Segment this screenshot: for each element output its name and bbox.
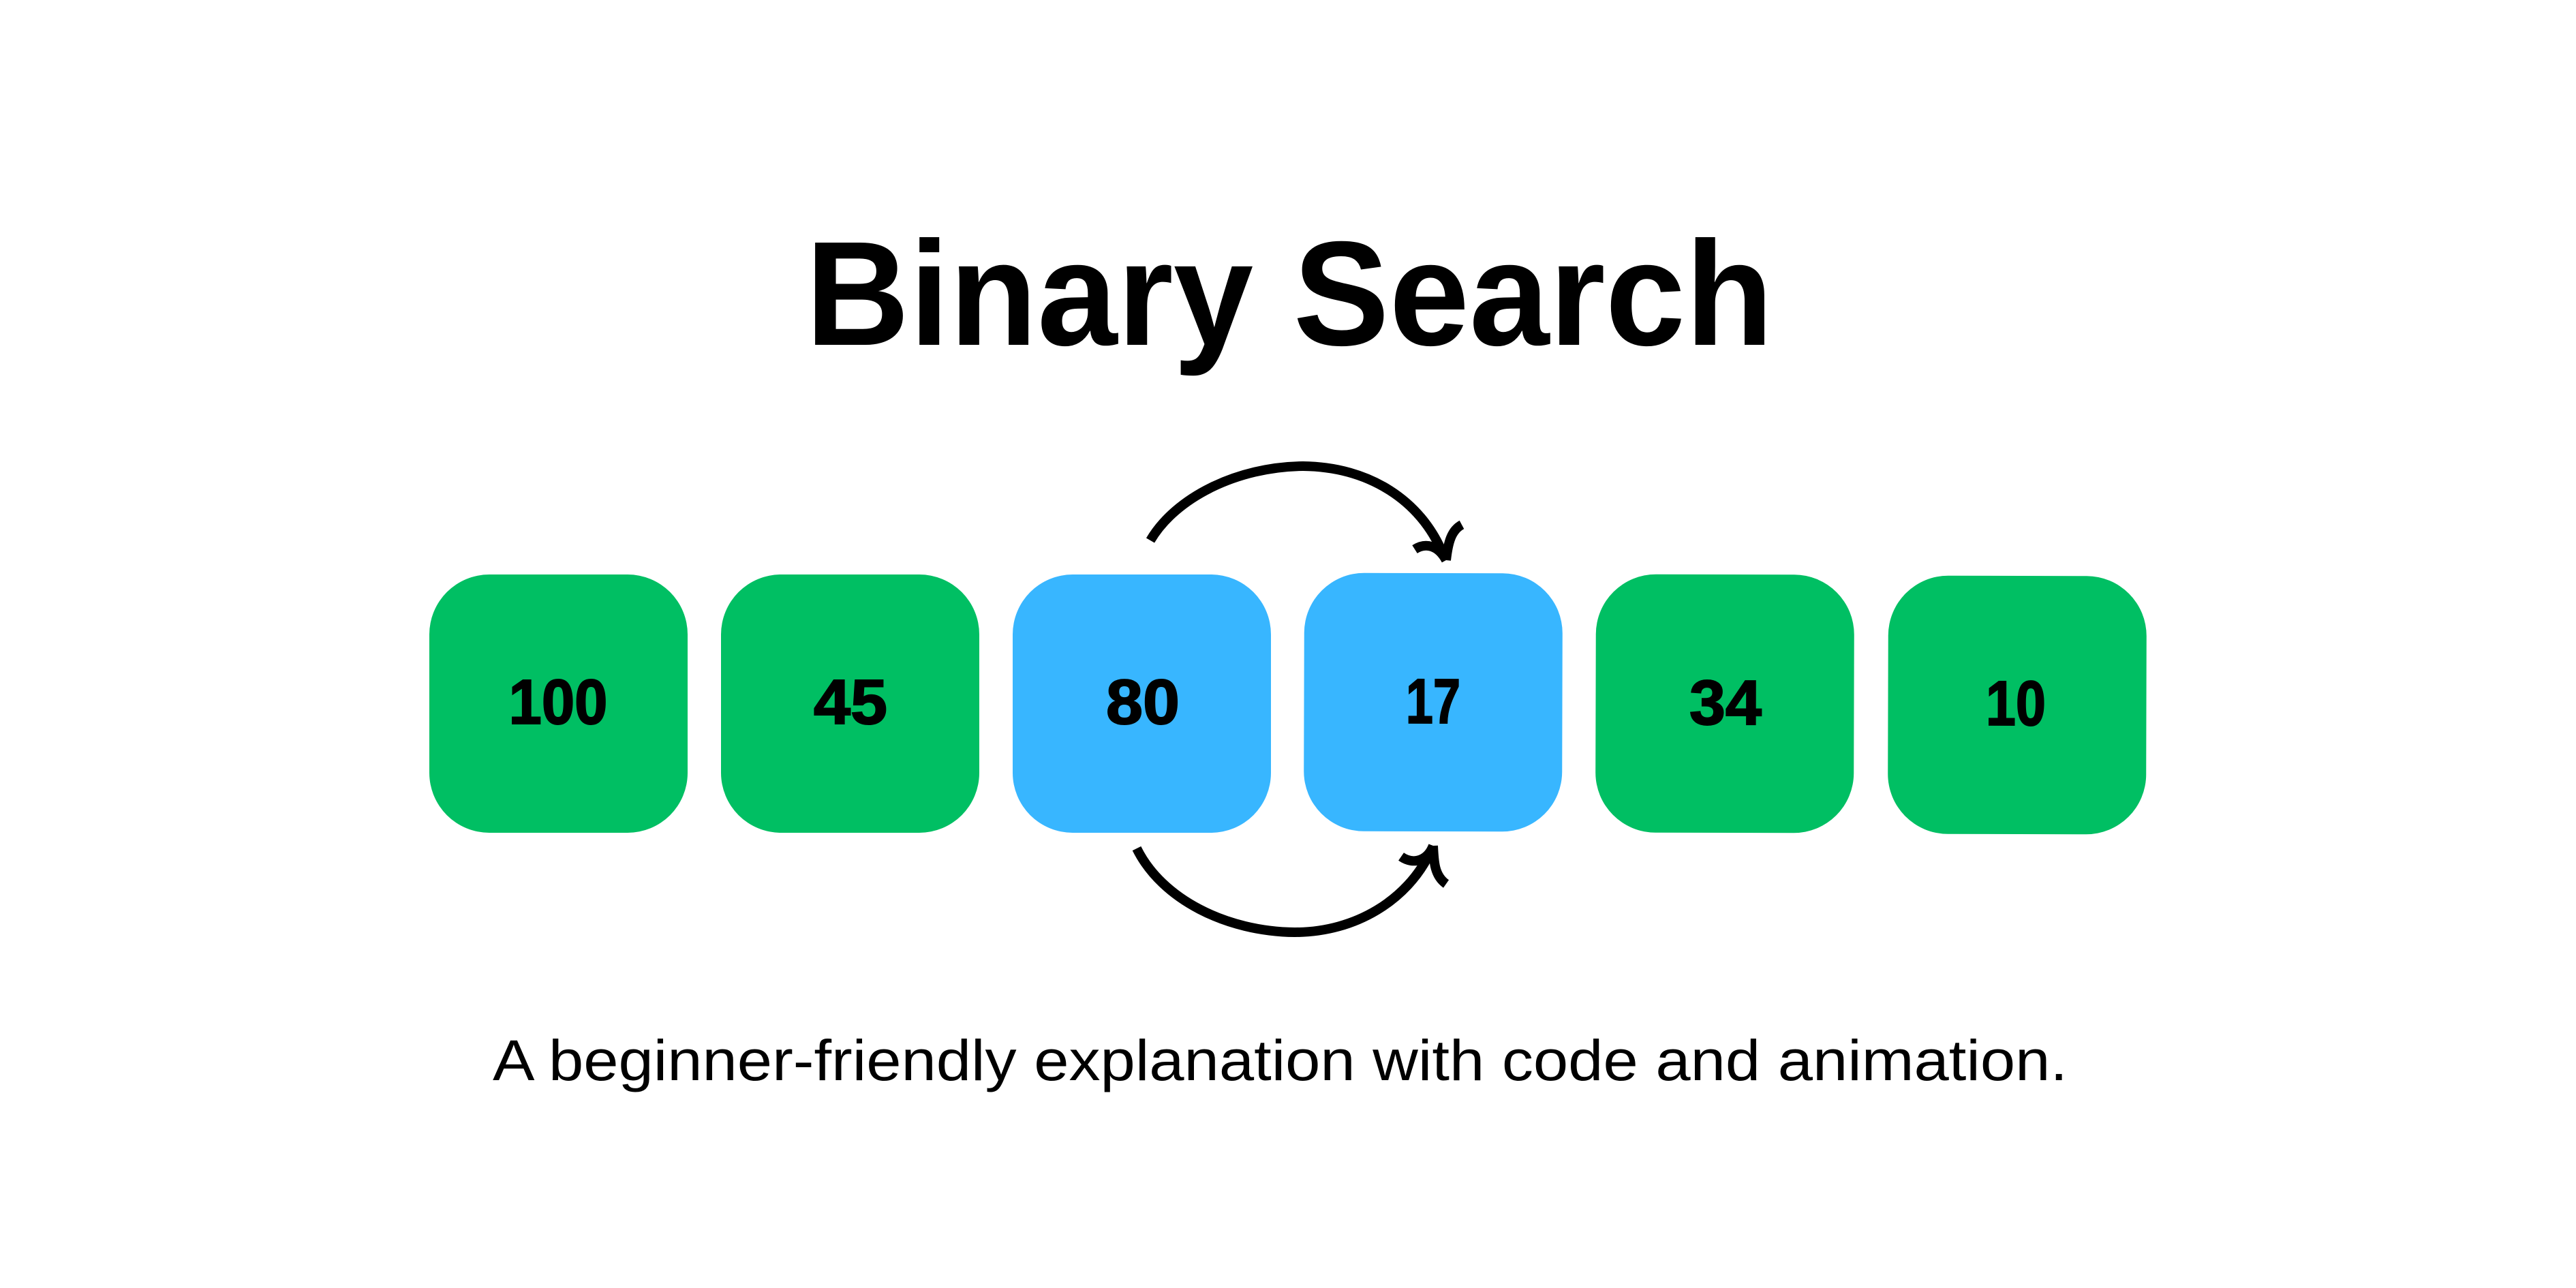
cell: 10: 10: [1986, 668, 2046, 739]
cell: 100: [429, 574, 688, 833]
cell: 17 (highlighted): 17: [1406, 666, 1460, 737]
cell: 17 (highlighted): [1304, 573, 1563, 831]
cell: 80 (highlighted): [1013, 574, 1271, 833]
array row of number cells: [429, 573, 2147, 834]
arrow: top swap arc from 80 to 17: [1150, 466, 1462, 560]
cell: 10: [1888, 576, 2147, 834]
cell: 34: 34: [1689, 667, 1762, 738]
cell: 45: 45: [814, 666, 887, 737]
cell: 100: 100: [508, 666, 608, 737]
subtitle: A beginner-friendly explanation with code and animation.: [493, 1028, 2068, 1092]
arrow: bottom swap arc from 80 to 17: [1137, 846, 1446, 932]
cell: 34: [1595, 574, 1854, 833]
cell: 45: [721, 574, 979, 833]
cell: 80 (highlighted): 80: [1106, 666, 1180, 737]
title: Binary Search: [806, 211, 1773, 377]
